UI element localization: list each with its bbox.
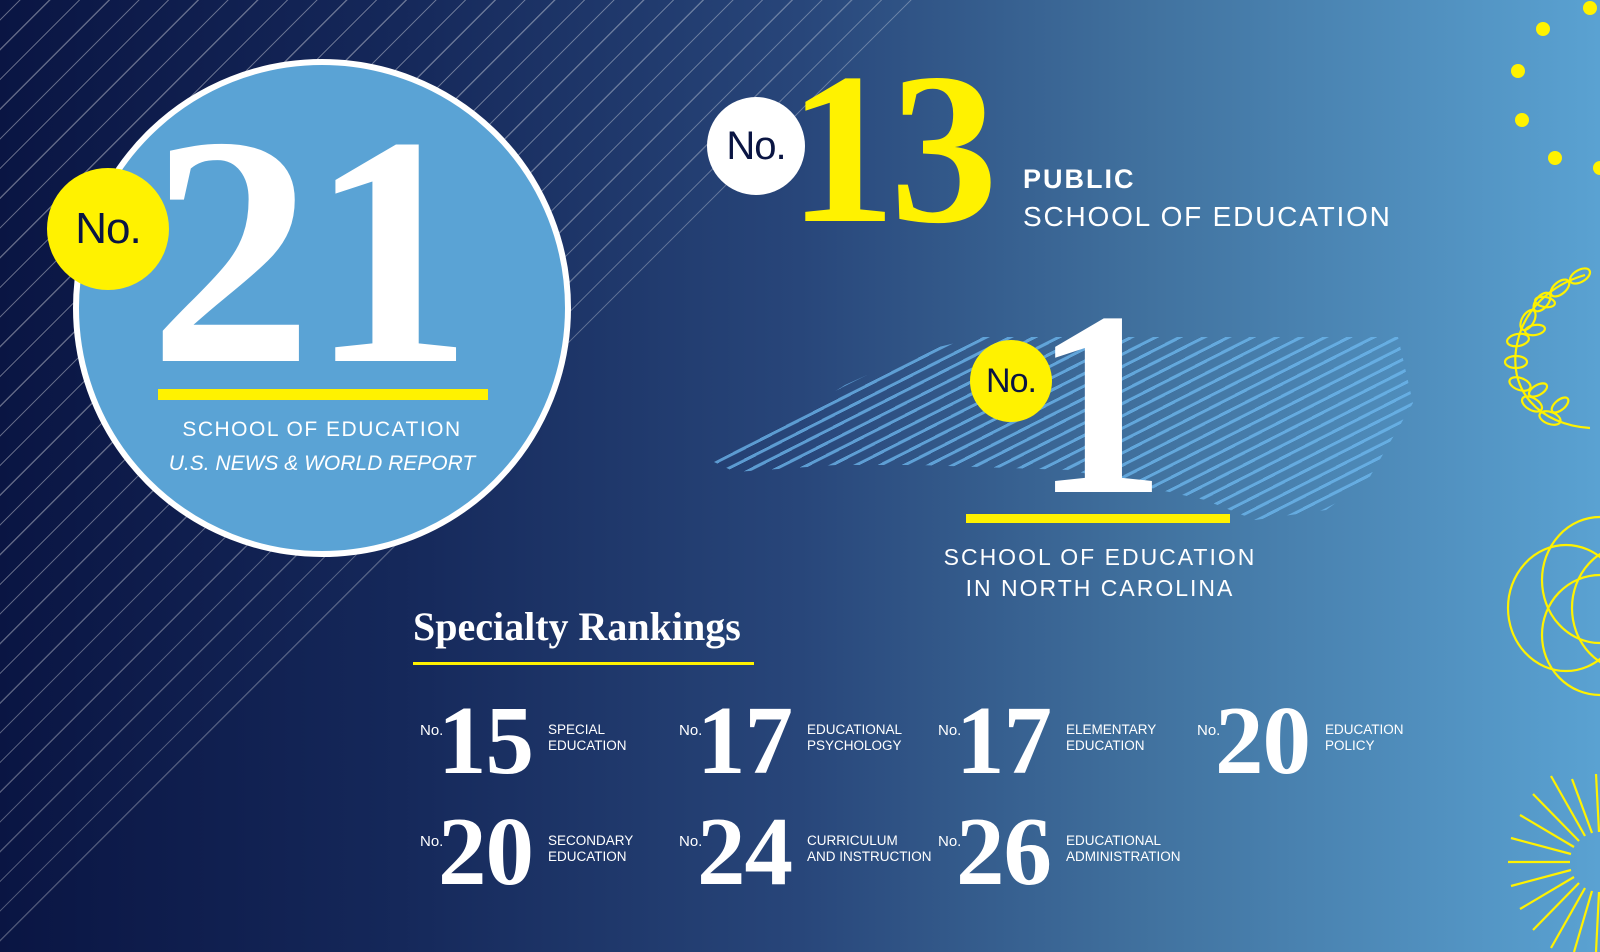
NC map stripes [714,337,1413,520]
decorations right [1504,1,1600,952]
rank 24: CURRICULUM [807,833,898,848]
badge: No. white: No. [726,124,786,168]
rank 17 psych: PSYCHOLOGY [807,738,902,753]
rank 20 policy: 20 [1215,687,1310,794]
rank 20 secondary: No. [420,833,443,850]
rank 17 elem: No. [938,722,961,739]
text: NC [944,544,1256,601]
rank 20 policy: No. [1197,722,1220,739]
rank 17 elem: 17 [956,687,1051,794]
rank 17 psych: EDUCATIONAL [807,722,902,737]
rank 17 elem [938,687,1156,794]
text: public school of education: SCHOOL OF EDUCATION [1023,201,1392,232]
big number 1: 1 [1034,258,1166,549]
icon: sunburst [1508,774,1599,952]
rank 20 secondary: EDUCATION [548,849,627,864]
rank 20 secondary [420,798,633,905]
text: public school of education: PUBLIC [1023,164,1136,194]
rank 20 policy [1197,687,1404,794]
caption [169,418,476,475]
rank 20 secondary: 20 [438,798,533,905]
rank 20 policy: POLICY [1325,738,1375,753]
rank 24 [679,798,932,905]
badge: No. yellow [47,168,169,290]
rank 26: 26 [956,798,1051,905]
rank 17 psych: No. [679,722,702,739]
rank 26: ADMINISTRATION [1066,849,1180,864]
rank 15: No. [420,722,443,739]
big number 21: 21 [149,69,469,432]
rank 15: SPECIAL [548,722,605,737]
yellow bar NC [966,514,1230,523]
icon: rings [1508,517,1600,695]
text: NC: IN NORTH CAROLINA [966,575,1234,601]
yellow bar [158,389,488,400]
big number 13: 13 [788,29,992,268]
rank 15: 15 [438,687,533,794]
caption: U.S. NEWS & WORLD REPORT [169,452,475,475]
rank 17 psych [679,687,902,794]
rank 24: No. [679,833,702,850]
badge: No. NC: No. [986,362,1036,400]
badge: No. white [707,97,805,195]
rank 17 elem: EDUCATION [1066,738,1145,753]
heading: specialty rankings: Specialty Rankings [413,604,741,649]
rank 26: EDUCATIONAL [1066,833,1161,848]
caption: SCHOOL OF EDUCATION [182,418,462,441]
icon: dots [1511,1,1600,175]
rank 15 [420,687,627,794]
text: NC: SCHOOL OF EDUCATION [944,544,1256,570]
rank 20 secondary: SECONDARY [548,833,633,848]
background stripes [0,0,940,952]
rank 26 [938,798,1180,905]
panel: No. 21 circle [73,59,571,557]
icon: laurel [1505,265,1593,428]
rank 17 psych: 17 [697,687,792,794]
rank 26: No. [938,833,961,850]
rank 20 policy: EDUCATION [1325,722,1404,737]
rank 17 elem: ELEMENTARY [1066,722,1156,737]
rank 24: 24 [697,798,792,905]
badge: No. yellow: No. [75,204,141,253]
text: public school of education [1023,164,1392,232]
underline [413,662,754,665]
badge: No. NC [970,340,1052,422]
rank 24: AND INSTRUCTION [807,849,932,864]
rank 15: EDUCATION [548,738,627,753]
